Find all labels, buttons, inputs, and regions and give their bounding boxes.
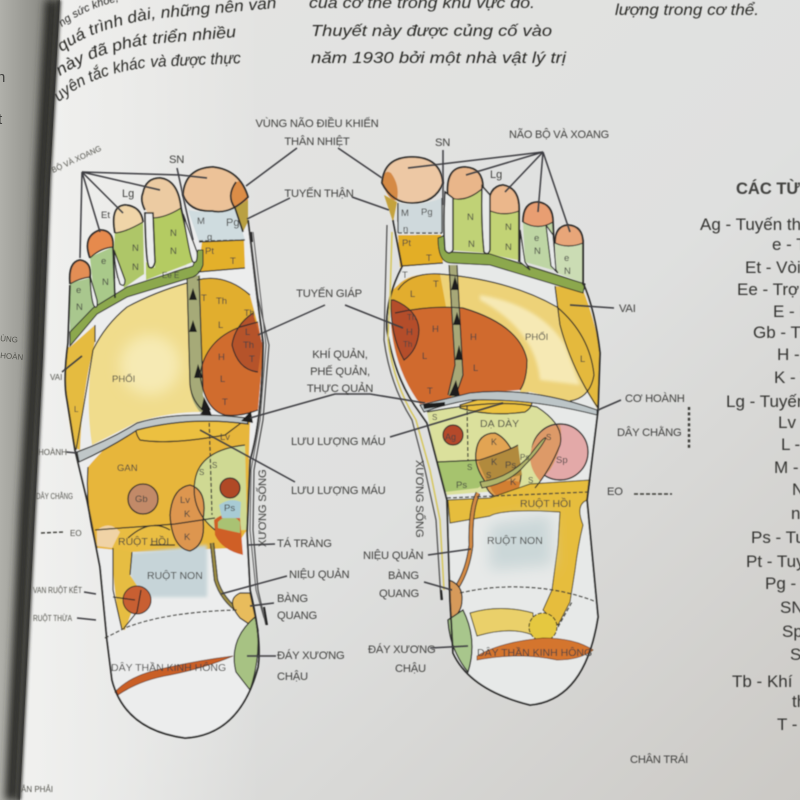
right ureter: [457, 493, 478, 587]
left zone letters: S: [212, 461, 217, 470]
label: bladder, right: BÀNG: [388, 569, 419, 582]
left diaphragm band: [77, 415, 248, 462]
left zone letters: L: [245, 327, 250, 338]
right sciatic nerve: [477, 638, 593, 660]
right heart and lung zone: [391, 307, 527, 404]
right zone letters: [401, 169, 592, 659]
legend entries: Tb - Khí: [732, 672, 793, 691]
left zone letters: GAN: [117, 463, 138, 474]
label: pelvic floor, right: ĐÁY XƯƠNG: [368, 643, 436, 656]
diagram labels: [21, 117, 688, 794]
left zone letters: Lv: [180, 495, 190, 506]
right spine lines: [384, 225, 441, 600]
left zone letters: L: [74, 405, 79, 414]
right Pt zone: [398, 235, 443, 267]
label: SN, left: SN: [169, 154, 184, 166]
right arrow strip: [448, 265, 463, 398]
label: right foot caption: ÂN PHẢI: [21, 785, 53, 794]
right internal lines: [398, 198, 594, 401]
diagram labels: PHẾ QUẢN,: [310, 365, 370, 378]
legend entries: Ee - Trợ: [737, 280, 799, 299]
legend entries: Pg -: [765, 574, 796, 593]
left stomach zone: [194, 445, 247, 530]
right zone letters: n: [403, 224, 408, 235]
right zone letters: T: [402, 270, 408, 281]
leaders: trachea: [250, 394, 425, 418]
left sciatic nerve: [115, 656, 233, 695]
diagram labels: CHẬU: [277, 670, 308, 683]
left yellow zone: [197, 278, 258, 400]
diagram labels: QUANG: [379, 588, 419, 600]
left duodenum: [214, 514, 243, 555]
text column 3: lượng trong cơ thể.: [615, 1, 759, 19]
right foot sole base: [387, 220, 600, 705]
label: brain and sinus, left: BỘ VÀ XOANG: [50, 144, 103, 175]
left valve circle: [123, 586, 151, 614]
right foot outline: [387, 220, 600, 705]
left toe band: [70, 250, 203, 346]
left zone letters: T: [249, 354, 255, 365]
left zone letters: N: [170, 246, 177, 257]
left zone letters: Th: [216, 296, 227, 307]
label: bladder, left: BÀNG: [277, 592, 308, 605]
left zone letters: T: [222, 397, 228, 408]
left zone letters: Gb: [135, 494, 148, 505]
label: hypothalamus: VÙNG NÃO ĐIỀU KHIỂN: [255, 117, 379, 130]
right big toe: [382, 157, 443, 203]
left liver: [87, 417, 250, 552]
left zone letters: Th: [243, 340, 254, 351]
right zone letters: RUỘT HỒI: [520, 497, 571, 510]
right zone letters: PHỔI: [525, 331, 548, 343]
left big toe: [183, 167, 248, 212]
right zone letters: e: [534, 233, 539, 244]
legend entries: T -: [777, 715, 797, 734]
left toe outlines: [70, 260, 94, 304]
left internal lines: [76, 283, 187, 450]
right ileum and colon: [448, 480, 590, 625]
left zone letters: S: [199, 468, 204, 477]
leaders: left side labels: [62, 356, 96, 620]
right zone letters: Pg: [421, 207, 433, 218]
left Lv oval: [136, 418, 245, 442]
right zone letters: K: [491, 437, 497, 447]
left shoulder column: [66, 325, 95, 450]
left zone letters: Th: [244, 308, 255, 318]
label: blood flow 1: LƯU LƯỢNG MÁU: [291, 435, 386, 448]
right zone letters: T: [427, 386, 433, 397]
left pancreas: [219, 500, 241, 518]
left ascending colon: [113, 546, 140, 630]
left zone letters: T: [230, 256, 236, 267]
right zone letters: S: [486, 471, 491, 480]
right shoulder column: [555, 286, 600, 410]
right stomach zone: [427, 403, 561, 495]
right zone letters: Ag: [445, 432, 456, 442]
left zone letters: Ps: [224, 503, 235, 514]
label: diaphragm, left: HOÀNH: [38, 448, 67, 457]
legend entries: [700, 215, 800, 734]
right adrenal Ag circle: [443, 425, 463, 445]
leaders: hypothalamus: [246, 148, 382, 186]
leaders: adrenal: [247, 197, 389, 219]
label: pelvic floor, left: ĐÁY XƯƠNG: [277, 649, 344, 662]
left zone letters: K: [184, 509, 191, 520]
right Ps zone: [438, 460, 490, 492]
left ileum: [96, 525, 175, 552]
label: SN, right: SN: [435, 137, 450, 149]
label: appendix: RUỘT THỪA: [33, 614, 73, 623]
right zone letters: L: [580, 354, 585, 365]
left adrenal Ag circle: [220, 478, 240, 498]
label: brain and sinus, right: NÃO BỘ VÀ XOANG: [509, 128, 609, 141]
label: ureter, left: NIỆU QUẢN: [289, 568, 349, 581]
right zone letters: N: [468, 239, 475, 250]
book gutter and facing page: ÙNG: [0, 334, 18, 345]
right diaphragm band: [420, 391, 597, 415]
right zone letters: M: [401, 208, 409, 219]
body text, top columns: uyên tắc khác và được thực: [54, 52, 242, 102]
right zone letters: DẠ DÀY: [480, 417, 519, 430]
left zone letters: e: [76, 285, 81, 296]
label: shoulder, right: VAI: [619, 303, 636, 315]
diagram labels: THÂN NHIỆT: [284, 135, 350, 148]
left toes fill: [70, 278, 98, 335]
left zone letters: RUỘT HỒI: [118, 535, 169, 548]
left zone letters: e: [101, 256, 106, 267]
left zone letters: N: [132, 243, 139, 254]
right zone letters: H: [470, 332, 477, 343]
right zone letters: N: [467, 212, 474, 223]
label: ligament, left: DÂY CHẰNG: [36, 492, 73, 501]
label: duodenum: TÁ TRÀNG: [277, 537, 332, 550]
right zone letters: L: [422, 351, 427, 362]
left zone letters: H: [218, 352, 225, 363]
right zone letters: L: [473, 363, 478, 374]
left zone letters: g: [207, 232, 212, 243]
left foot sole base: [65, 210, 263, 738]
label: left foot caption: CHÂN TRÁI: [630, 753, 688, 766]
left bladder: [232, 593, 258, 630]
label: EO, right: EO: [607, 486, 623, 498]
right toe outlines: [382, 157, 443, 203]
leaders: right foot, lower labels: [424, 549, 471, 648]
left zone letters: Lv: [220, 432, 230, 443]
right zone letters: Th: [403, 340, 412, 349]
right zone letters: S: [432, 413, 437, 422]
label: ureter, right: NIỆU QUẢN: [363, 549, 423, 562]
right zone letters: K: [491, 457, 498, 468]
left pelvic floor: [234, 617, 258, 690]
right bladder: [449, 580, 462, 620]
right zone letters: Lg: [490, 169, 502, 181]
left spine lines: [250, 232, 269, 625]
right gaps between toes: [444, 192, 453, 253]
right lung: [397, 274, 594, 401]
left zone letters: Et: [101, 210, 110, 221]
right zone letters: H: [406, 327, 413, 338]
right zone letters: S: [467, 463, 472, 472]
right zone letters: Th: [407, 313, 416, 322]
body text, top columns: [54, 0, 759, 102]
legend: [700, 179, 800, 734]
right toe band: [438, 235, 585, 293]
label: ileocecal valve: VAN RUỘT KẾT: [33, 585, 82, 595]
label: thyroid: TUYẾN GIÁP: [296, 287, 362, 300]
leaders: thyroid: [258, 305, 403, 335]
right sigmoid colon: [470, 608, 533, 636]
right kidney oval: [476, 433, 521, 498]
left zone letters: DÂY THẦN KINH HÔNG: [111, 661, 226, 674]
left arrow strip: [187, 275, 210, 412]
left foot diagram: [65, 167, 269, 738]
right zone letters: L: [410, 289, 415, 300]
left zone letters: [74, 188, 255, 674]
left zone letters: K: [184, 532, 191, 543]
body text, top columns: Thuyết này được củng cố vào: [311, 23, 552, 40]
left zone letters: Ee E: [162, 271, 179, 280]
right zone letters: N: [564, 266, 571, 277]
right spleen: [532, 424, 588, 480]
diagram labels: CHẬU: [395, 662, 426, 675]
right M and Pg zone: [398, 198, 442, 233]
left foot outline: [65, 220, 263, 738]
diagram labels: QUANG: [277, 610, 317, 622]
left ureter: [212, 543, 240, 612]
left zone letters: N: [132, 262, 139, 273]
right zone letters: T: [426, 253, 432, 264]
right pancreas tail: [480, 438, 546, 488]
left zone letters: L: [220, 374, 225, 385]
right zone letters: H: [432, 324, 439, 335]
body text, top columns: năm 1930 bởi một nhà vật lý trị: [311, 50, 567, 67]
left small intestine: [130, 545, 207, 597]
left M and Pg zone: [188, 207, 245, 242]
label: shoulder, left: VAI: [50, 373, 62, 382]
right zone letters: DÂY THẦN KINH HÔNG: [477, 646, 592, 659]
leaders: brain and sinus, left foot: [80, 172, 207, 258]
right toes fill: [448, 188, 487, 253]
leaders: brain and sinus, right foot: [408, 152, 570, 232]
right small intestine: [490, 515, 552, 570]
right pelvic floor: [448, 610, 472, 672]
label: spine, left foot: XƯƠNG SỐNG: [255, 470, 269, 547]
label: trachea: KHÍ QUẢN,: [312, 348, 368, 361]
left lung: [89, 283, 200, 445]
ligament dashes: [688, 407, 690, 450]
right zone letters: K: [510, 477, 517, 488]
leaders: left foot, lower labels: [221, 544, 287, 656]
body text, top columns: này đã phát triển nhiều: [56, 25, 236, 76]
left heart and lung zone: [200, 322, 263, 415]
right zone letters: S: [528, 476, 533, 485]
right zone letters: N: [505, 242, 512, 253]
right zone letters: RUỘT NON: [487, 534, 543, 547]
left zone letters: RUỘT NON: [147, 569, 203, 582]
right foot diagram: [382, 157, 600, 705]
label: ligament, right: DÂY CHẰNG: [617, 426, 682, 439]
legend entries: Lv: [778, 413, 796, 432]
legend entries: M -: [774, 458, 799, 477]
left zone letters: N: [170, 228, 177, 239]
right zone letters: S: [546, 433, 551, 442]
label: adrenal: TUYẾN THẬN: [284, 187, 354, 200]
right zone letters: T: [433, 279, 439, 290]
left zone letters: T: [201, 293, 207, 304]
left gall bladder: [128, 484, 158, 514]
leaders: blood flow: [200, 403, 503, 482]
label: EO, left: EO: [70, 529, 82, 538]
left gaps between toes: [90, 276, 97, 307]
diagram labels: THỰC QUẢN: [307, 382, 373, 395]
right zone letters: N: [505, 222, 512, 233]
right zone letters: Ps: [505, 460, 516, 471]
left Pt zone: [198, 240, 245, 272]
left zone letters: L: [218, 320, 223, 331]
leader lines: [41, 148, 689, 656]
right zone letters: N: [534, 246, 541, 257]
leaders: right side labels: [570, 305, 621, 410]
left zone letters: Pt: [205, 246, 214, 257]
left zone letters: N: [102, 277, 109, 288]
label: blood flow 2: LƯU LƯỢNG MÁU: [291, 484, 386, 497]
left zone letters: M: [197, 216, 205, 227]
right zone letters: Pt: [402, 238, 411, 249]
left zone letters: Lg: [122, 188, 134, 200]
right zone letters: Ps: [456, 480, 467, 491]
left zone letters: N: [76, 302, 83, 313]
label: spine, right foot: XƯƠNG SỐNG: [413, 460, 427, 537]
right zone letters: Ps: [520, 453, 529, 462]
label: diaphragm, right: CƠ HOÀNH: [625, 392, 685, 405]
right Lv oval: [460, 393, 532, 414]
left zone letters: Pg: [226, 217, 239, 229]
EO dashes: [41, 494, 672, 533]
leaders: SN: [177, 150, 443, 240]
right zone letters: Sp: [556, 455, 568, 466]
book gutter and facing page: HOÀN: [0, 351, 24, 362]
left kidney oval: [170, 485, 204, 551]
right zone letters: e: [564, 253, 569, 264]
left zone letters: PHỔI: [112, 373, 135, 385]
